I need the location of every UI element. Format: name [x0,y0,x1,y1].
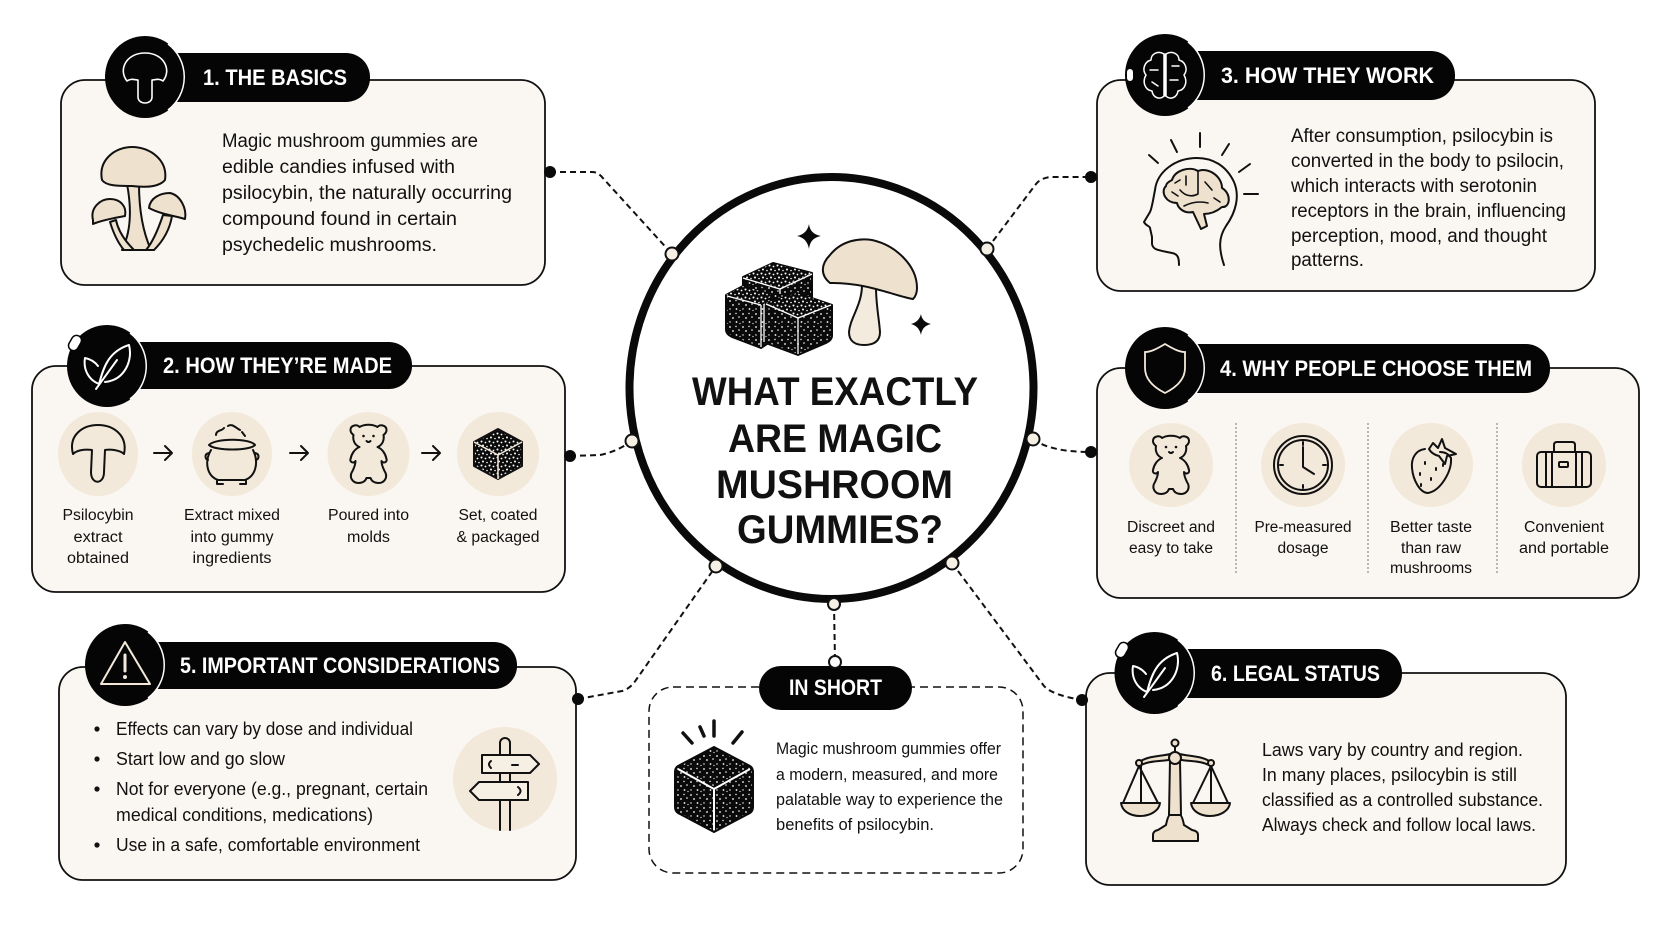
bullet list: medical conditions, medications) [116,805,373,825]
icon: mushroom [823,239,917,345]
step: extract mixed: ingredients [192,550,272,567]
step: extract mixed: into gummy [190,529,274,546]
heading: the basics: 1. THE BASICS [203,65,347,90]
dividers [1236,423,1497,573]
step: set, coated, packaged [456,412,540,546]
title: GUMMIES? [737,508,943,552]
step: psilocybin extract: obtained [67,550,129,567]
heading: how they work [1125,34,1455,116]
heading: the basics [105,36,370,118]
body text: a modern, measured, and more [776,765,998,784]
bullet list: Start low and go slow [116,749,286,769]
step: psilocybin extract: extract [74,529,123,546]
title: MUSHROOM [716,463,953,507]
icon: sparkles [797,224,931,335]
heading: why people choose them: 4. WHY PEOPLE CHOOSE THEM [1220,356,1532,381]
icon: shield badge [1145,344,1185,393]
heading: legal status [1114,632,1402,714]
benefit: pre-measured: dosage [1278,540,1328,557]
body text: Laws vary by country and region. [1262,739,1523,760]
icon: mushroom badge [123,53,167,103]
step: poured into molds: Poured into [328,507,409,524]
heading: how they work: 3. HOW THEY WORK [1221,63,1434,88]
heading: in short [759,666,912,710]
benefit: convenient: and portable [1519,540,1609,557]
step: extract mixed: Extract mixed [184,507,280,524]
body text: Magic mushroom gummies offer [776,739,1001,758]
benefit: discreet [1127,423,1215,557]
step: extract mixed [184,412,280,567]
arrow [422,446,440,460]
arrow [290,446,308,460]
panel: 4 why people choose them [1097,327,1639,598]
benefit: better taste [1389,423,1473,577]
step: poured into molds [328,412,410,546]
panel connector dots [544,166,1097,706]
title [692,370,978,552]
body text: edible candies infused with [222,157,455,178]
icon: leaf badge [85,345,130,389]
benefit: discreet: easy to take [1129,540,1213,557]
body text: patterns. [1291,250,1364,271]
heading: how they're made: 2. HOW THEY’RE MADE [163,353,392,378]
benefit: better taste: Better taste [1390,519,1472,536]
body text [222,131,512,256]
benefit: pre-measured [1254,423,1352,557]
benefit: better taste: mushrooms [1390,560,1472,577]
panel: 2 how they're made [32,325,565,592]
bullet list: Not for everyone (e.g., pregnant, certain [116,779,428,799]
benefit: discreet: Discreet and [1127,519,1215,536]
step: psilocybin extract [58,412,138,567]
panel: 6 legal status [1086,632,1566,885]
panel: 5 important considerations [59,624,576,880]
body text: Magic mushroom gummies are [222,131,478,152]
dashed connectors [550,172,1091,700]
heading: how they're made [67,325,412,407]
icon: brain badge [1144,52,1186,98]
body text: classified as a controlled substance. [1262,789,1543,810]
body text: In many places, psilocybin is still [1262,764,1517,785]
icon: mushroom cluster [92,147,185,250]
heading: legal status: 6. LEGAL STATUS [1211,661,1380,686]
heading: in short: IN SHORT [789,675,882,700]
connector nodes [626,242,1040,668]
benefit: pre-measured: Pre-measured [1254,519,1352,536]
title: WHAT EXACTLY [692,370,978,414]
benefit: convenient: Convenient [1524,519,1605,536]
body text: psilocybin, the naturally occurring [222,183,512,204]
benefit: better taste: than raw [1401,540,1462,557]
title: ARE MAGIC [728,417,942,461]
icon: scales of justice [1121,740,1230,841]
step: psilocybin extract: Psilocybin [62,507,134,524]
panel: 3 how they work [1097,34,1595,291]
heading: important considerations: 5. IMPORTANT CONSIDERATIONS [180,653,500,678]
bullet list: Effects can vary by dose and individual [116,719,413,739]
body text: receptors in the brain, influencing [1291,201,1566,222]
icon: leaf badge [1133,653,1178,697]
heading: important considerations [85,624,517,706]
bullet list: Use in a safe, comfortable environment [116,835,420,855]
icon: warning badge [101,642,150,684]
body text: perception, mood, and thought [1291,226,1548,247]
icon: sparkling gummy cube [675,721,753,832]
panel: 1 the basics [61,36,545,285]
center circle [630,177,1034,599]
icon: gummy cubes [726,263,832,355]
body text: Always check and follow local laws. [1262,814,1536,835]
panel: in short [649,666,1023,873]
body text: benefits of psilocybin. [776,815,934,834]
bullet list [94,719,428,855]
step: set, coated, packaged: Set, coated [458,507,538,524]
body text: compound found in certain [222,209,457,230]
body text [1290,126,1566,271]
body text: palatable way to experience the [776,790,1003,809]
body text: After consumption, psilocybin is [1291,126,1553,147]
step: set, coated, packaged: & packaged [456,529,540,546]
icon: head with brain [1144,133,1258,265]
body text: which interacts with serotonin [1290,176,1537,197]
benefit: convenient [1519,423,1609,557]
heading: why people choose them [1125,327,1550,409]
icon: signpost [453,727,557,831]
body text: converted in the body to psilocin, [1291,151,1564,172]
step: poured into molds: molds [347,529,390,546]
body text: psychedelic mushrooms. [222,235,437,256]
body text [1262,739,1543,835]
arrow [154,446,172,460]
body text [776,739,1003,834]
